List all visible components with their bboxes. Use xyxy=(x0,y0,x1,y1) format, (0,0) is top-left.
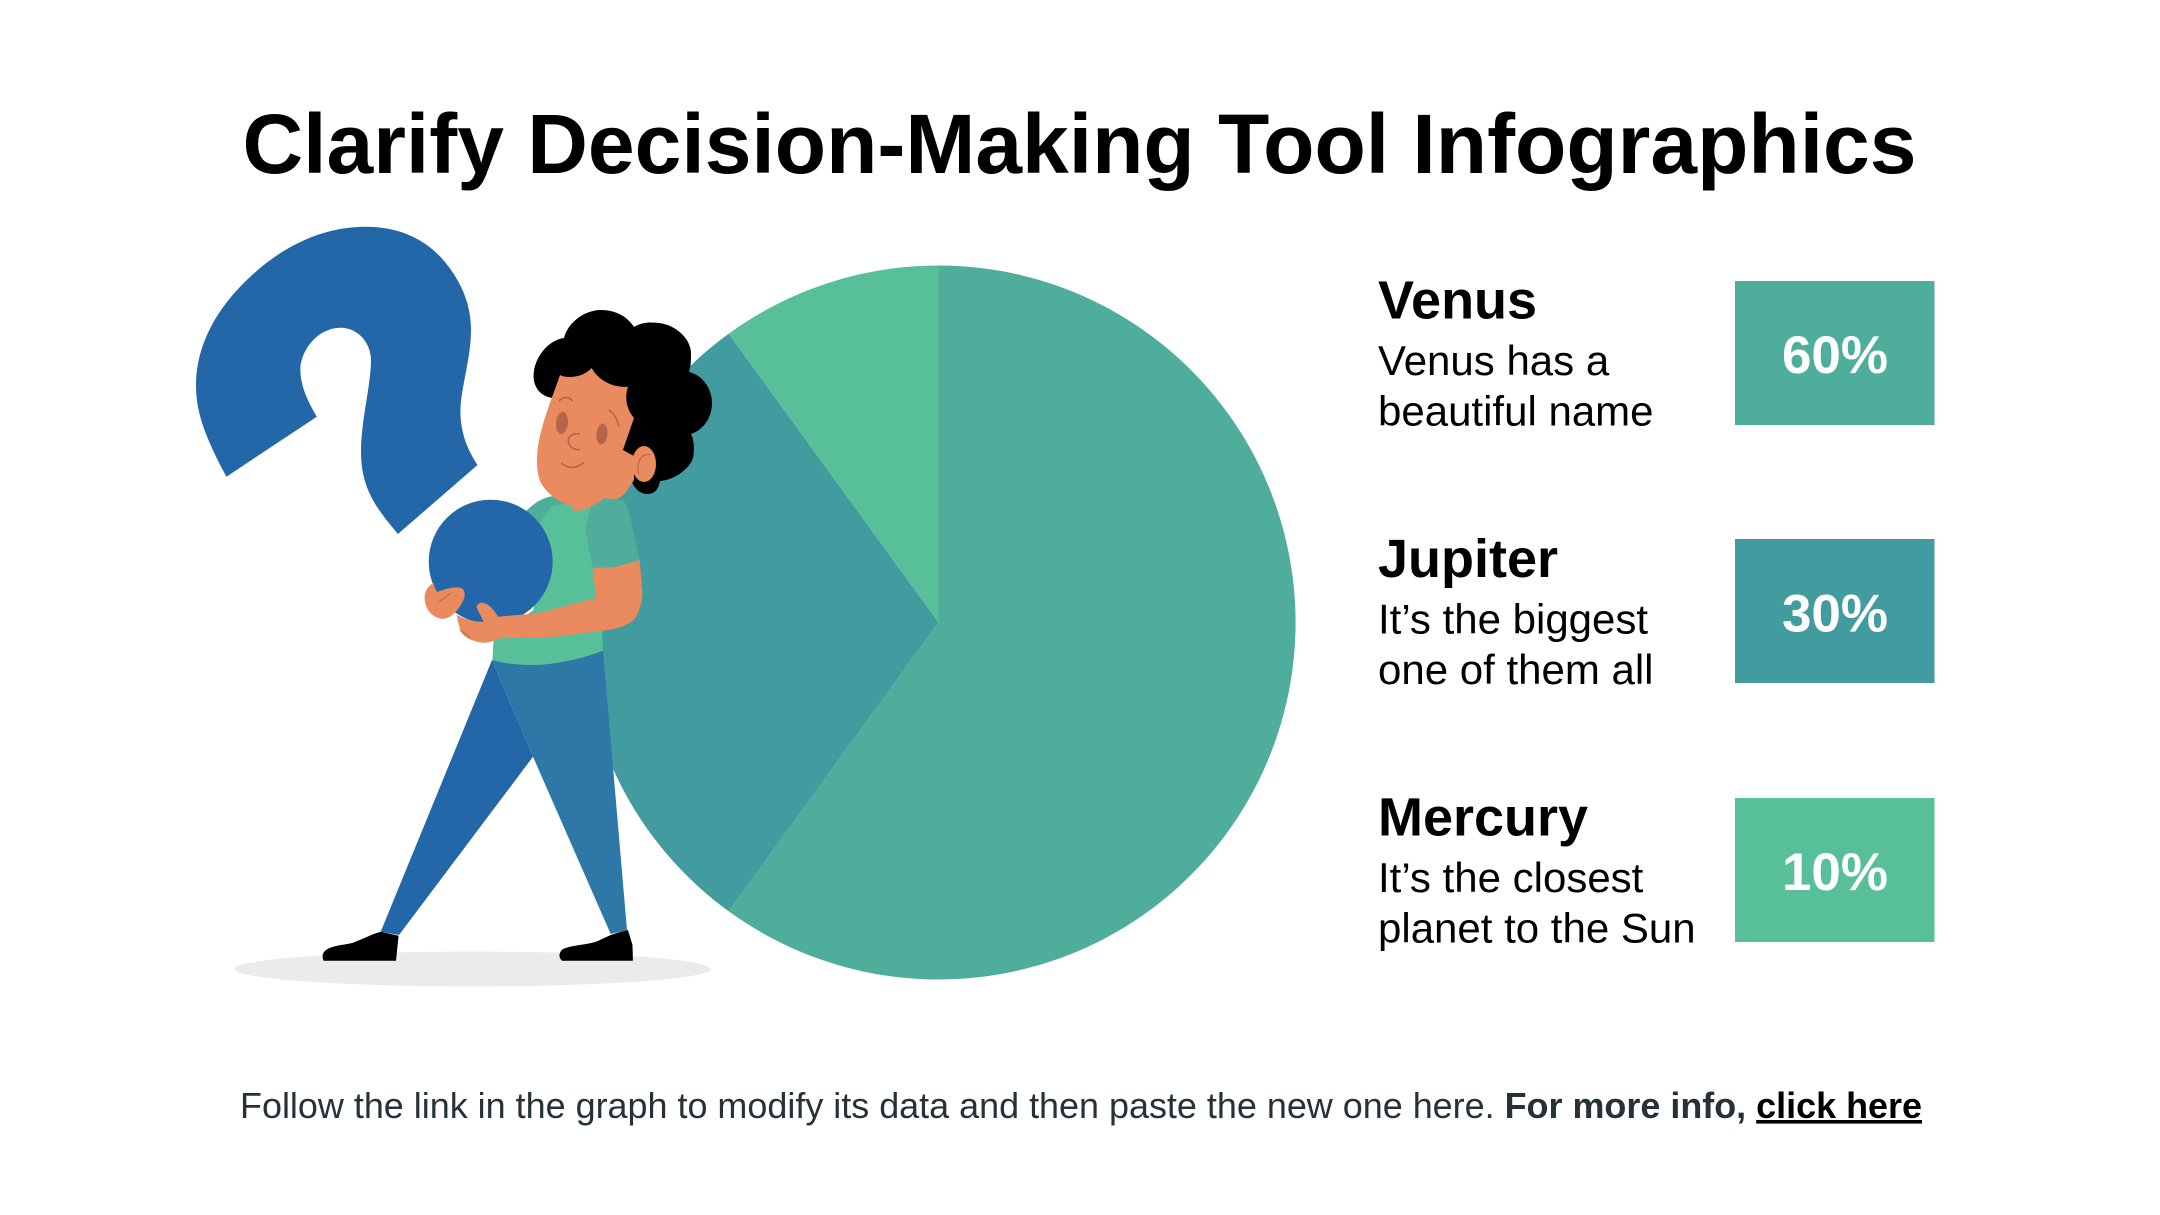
face xyxy=(537,368,634,512)
left eye xyxy=(555,411,569,435)
value: 30%: 30% xyxy=(1782,584,1888,644)
left eyebrow xyxy=(559,398,573,401)
illustration: person holding ball xyxy=(323,310,712,961)
description: Mercury: It’s the closest xyxy=(1378,854,1644,901)
value: 10%: 10% xyxy=(1782,843,1888,902)
front leg xyxy=(492,651,627,934)
heading: Venus: Venus xyxy=(1378,270,1537,330)
description: Jupiter: It’s the biggest xyxy=(1378,596,1648,642)
description: Mercury: planet to the Sun xyxy=(1378,904,1696,952)
pie slice: Venus 60% xyxy=(729,266,1296,980)
pie slice: Jupiter 30% xyxy=(582,334,938,911)
pie chart xyxy=(582,266,1296,980)
sleeve xyxy=(585,498,640,568)
right eye xyxy=(595,423,609,445)
ground shadow xyxy=(234,952,710,986)
legend item: Mercury xyxy=(1378,788,1934,952)
legend item: Venus xyxy=(1378,270,1934,434)
description: Venus: Venus has a xyxy=(1378,337,1610,384)
shirt back xyxy=(525,496,570,530)
finger creases xyxy=(439,593,471,638)
legend item: Jupiter xyxy=(1378,529,1934,693)
value box: 60% xyxy=(1735,281,1934,425)
hair xyxy=(534,310,712,494)
right eyebrow xyxy=(609,410,619,427)
value box: 30% xyxy=(1735,539,1934,683)
mouth xyxy=(561,463,584,467)
footer note: Follow the link in the graph to modify its data and then paste the new one here. For more info, click here xyxy=(240,1085,1922,1126)
other hand xyxy=(425,583,465,619)
right shoe xyxy=(559,930,633,961)
icon: question mark xyxy=(196,227,478,534)
back leg xyxy=(381,660,533,935)
heading: Jupiter: Jupiter xyxy=(1378,529,1558,589)
value box: 10% xyxy=(1735,798,1934,942)
ear detail xyxy=(638,455,650,474)
nose xyxy=(568,434,580,450)
shirt body xyxy=(492,503,603,665)
ear xyxy=(632,446,656,482)
left shoe xyxy=(323,932,399,961)
arm and hand xyxy=(457,560,642,643)
value: 60%: 60% xyxy=(1782,326,1888,385)
pie slice: Mercury 10% xyxy=(729,266,938,622)
ball xyxy=(429,500,553,624)
title: Clarify Decision-Making Tool Infographics xyxy=(243,97,1916,191)
description: Venus: beautiful name xyxy=(1378,388,1654,434)
description: Jupiter: one of them all xyxy=(1378,646,1654,693)
heading: Mercury: Mercury xyxy=(1378,788,1588,848)
